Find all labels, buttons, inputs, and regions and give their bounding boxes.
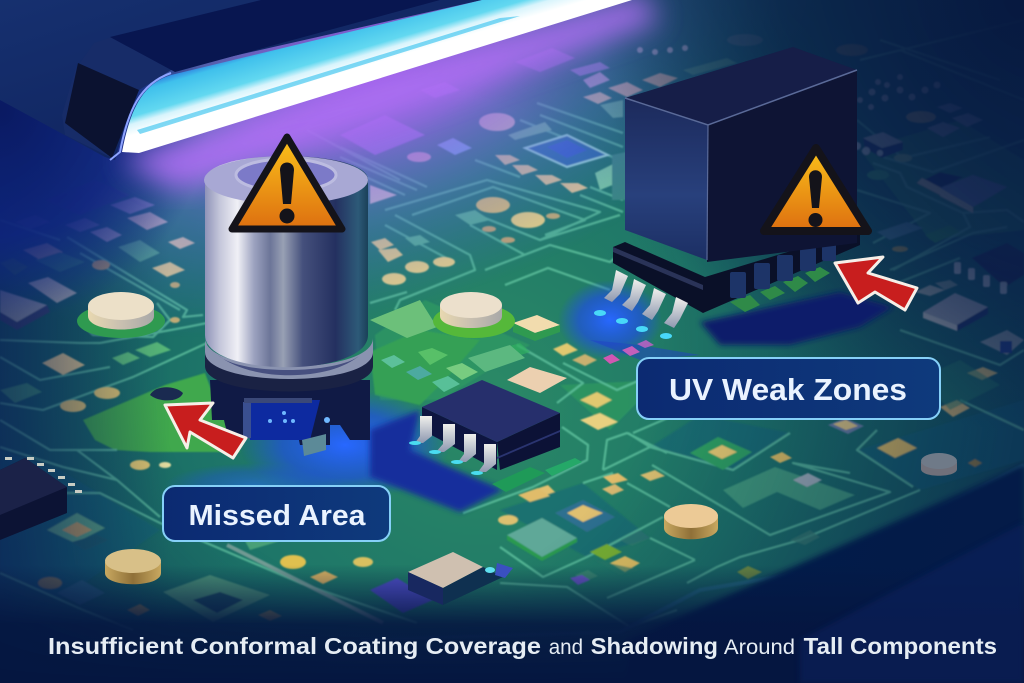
grey diagonal trace (227, 545, 383, 623)
label: missed area: Missed Area (188, 500, 366, 532)
silver pins (594, 270, 688, 339)
caption (48, 633, 997, 659)
transformer block (594, 47, 860, 339)
block right face (707, 70, 857, 262)
red arrow: UV weak zones (835, 257, 917, 310)
center pads next to chip (370, 300, 582, 492)
navy pins (730, 237, 836, 298)
dark oval near arrow (150, 387, 183, 400)
right pads and chips (853, 103, 1024, 417)
bright green area near capacitor (83, 373, 240, 452)
left pads and chips (0, 180, 195, 470)
blue shadow zones (165, 280, 893, 512)
capacitor top (204, 156, 368, 204)
caption: Tall Components (797, 633, 997, 659)
caption: Shadowing (584, 633, 718, 659)
dark IC left (0, 457, 82, 540)
warning icon: capacitor (232, 137, 342, 229)
button center (433, 292, 515, 338)
center and top pads (340, 34, 940, 285)
flat chip bottom (408, 552, 513, 605)
lamp light band (122, 0, 632, 153)
lamp top dark strip (110, 0, 440, 72)
gold button left (105, 549, 161, 584)
green lighter regions (375, 120, 1024, 430)
chip pins (409, 416, 496, 475)
label: UV weak zones (637, 358, 940, 419)
lamp glow (120, 0, 660, 190)
UV lamp (0, 0, 660, 190)
button left (77, 292, 165, 338)
lower pads and chips (38, 343, 982, 622)
block top face (625, 47, 857, 125)
green feet (730, 267, 830, 312)
SOIC chip (409, 380, 560, 475)
capacitor base (210, 380, 370, 456)
caption: and (543, 636, 583, 659)
bright green area right of capacitor (370, 330, 480, 405)
caption: Insufficient Conformal Coating Coverage (48, 633, 541, 659)
lamp housing (0, 0, 482, 160)
warning icon: block (764, 148, 868, 231)
gold button right (664, 504, 718, 539)
round button components (77, 292, 957, 584)
lamp cyan line (137, 16, 520, 134)
block base (613, 230, 860, 313)
capacitor (204, 156, 373, 456)
blue-teal board regions (0, 400, 1024, 600)
lamp rim (110, 73, 171, 160)
board lower right edge (627, 465, 1024, 683)
grey button right (921, 453, 957, 476)
capacitor ring (205, 342, 373, 392)
label: missed area (163, 486, 390, 541)
red arrow: missed area (165, 403, 246, 458)
block left face (625, 98, 708, 260)
capacitor body (205, 156, 368, 367)
board edge trace (360, 465, 1024, 640)
label: UV weak zones: UV Weak Zones (669, 372, 907, 407)
lamp housing end cap (62, 37, 171, 158)
caption: Around (719, 636, 795, 659)
